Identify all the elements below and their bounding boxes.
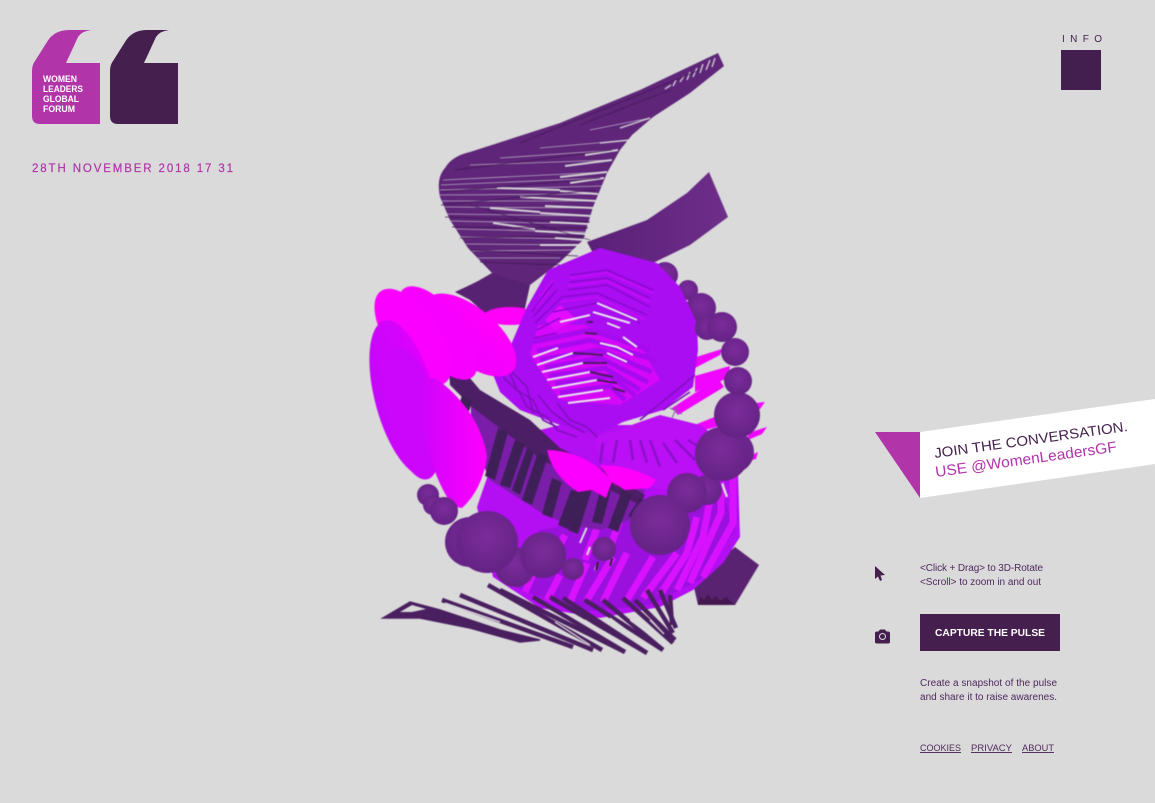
footer links: ABOUT: [1022, 743, 1054, 754]
oval 3: [360, 276, 466, 398]
ribbon dark lines: [441, 70, 700, 265]
snapshot text: Create a snapshot of the pulse: [920, 678, 1057, 689]
funnel white gaps: [533, 303, 637, 403]
icon: camera: [875, 630, 890, 644]
funnel magenta glow: [530, 325, 660, 405]
ribbon fine light gaps: [440, 58, 715, 258]
footer links: COOKIES: [920, 743, 961, 754]
magenta ovals: [355, 273, 656, 508]
bowl dark base: [510, 500, 735, 612]
instructions: <Scroll> to zoom in and out: [920, 577, 1041, 588]
oval 6: [421, 378, 487, 508]
lower-left dark ribbon: [455, 273, 530, 322]
oval 5: [372, 341, 452, 485]
capture button: CAPTURE THE PULSE: [935, 628, 1045, 639]
front spheres: [417, 312, 760, 587]
logo mark: dark quote: [110, 30, 178, 124]
bowl gaps: [580, 483, 727, 570]
second ribbon: [587, 172, 728, 263]
back spheres: [399, 262, 716, 468]
snapshot text: [920, 678, 1057, 703]
logo text: WOMEN: [43, 74, 77, 84]
lower petal 1: [547, 450, 620, 498]
upper polygon funnel: [492, 248, 698, 437]
right spikes: [672, 349, 767, 461]
banner handle: USE @WomenLeadersGF: [934, 439, 1118, 481]
right dark pentagon: [693, 547, 759, 605]
icon: cursor: [875, 566, 885, 581]
banner heading: JOIN THE CONVERSATION.: [933, 418, 1129, 461]
funnel inner purple rings: [533, 330, 655, 400]
conversation banner: [875, 399, 1155, 498]
slats: [453, 395, 646, 534]
slat band top: [448, 352, 645, 505]
lower funnel fan: [595, 415, 740, 500]
oval 1: [410, 278, 530, 392]
logo mark: magenta quote: [32, 30, 100, 124]
banner white ribbon: [920, 399, 1155, 498]
logo text: FORUM: [43, 104, 75, 114]
funnel lower contour lines: [497, 343, 695, 437]
3D pulse sculpture: [355, 53, 767, 653]
logo text: LEADERS: [43, 84, 83, 94]
flat magenta ellipse behind: [484, 307, 536, 325]
info button: [1061, 34, 1102, 90]
bottom dark ribbons: [383, 585, 676, 653]
funnel dark gaps: [573, 322, 625, 392]
info label: INFO: [1062, 34, 1102, 45]
funnel small filaments: [670, 405, 682, 418]
oval 4: [355, 313, 455, 483]
banner magenta fold: [875, 432, 920, 498]
instructions: <Click + Drag> to 3D-Rotate: [920, 563, 1043, 574]
dark slatted band: [448, 352, 646, 534]
logo text: [43, 74, 83, 114]
footer links: [920, 743, 1054, 754]
lower bowl: [477, 425, 740, 618]
striped gap beside funnel: [474, 335, 518, 400]
info square: [1061, 50, 1101, 90]
funnel upper chevron lines: [532, 270, 653, 338]
bowl curved stripes: [525, 477, 733, 602]
upper spiral ribbon: [439, 53, 724, 285]
lower petal 2: [600, 465, 656, 490]
logo text: GLOBAL: [43, 94, 79, 104]
date: 28TH NOVEMBER 2018 17 31: [32, 163, 233, 175]
logo: quotation marks: [32, 30, 178, 124]
slat purple backing: [470, 390, 645, 530]
footer links: PRIVACY: [971, 743, 1013, 754]
capture button: [920, 614, 1060, 651]
instructions: [920, 563, 1043, 588]
snapshot text: and share it to raise awarenes.: [920, 692, 1057, 703]
oval 2: [384, 273, 492, 393]
